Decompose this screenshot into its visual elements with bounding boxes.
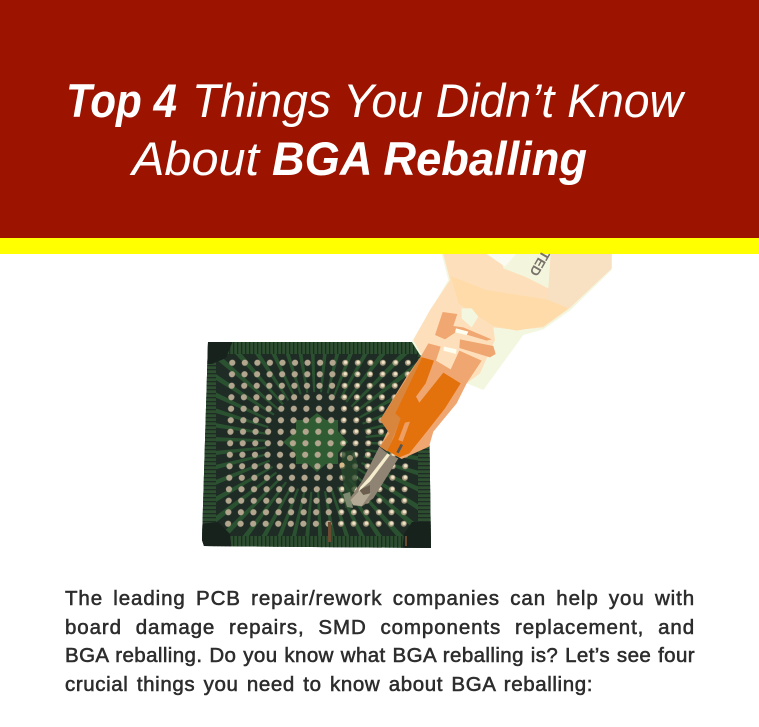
intro paragraph bbox=[65, 587, 695, 696]
barrel band bbox=[451, 276, 568, 331]
label white bbox=[487, 254, 516, 267]
collar highlights bbox=[462, 308, 478, 327]
centre pad bbox=[283, 413, 348, 472]
edge traces bbox=[198, 338, 434, 552]
brown stains bbox=[328, 522, 331, 542]
tip highlight bbox=[358, 453, 390, 492]
illustration and banner bbox=[0, 0, 759, 548]
intro paragraph: The leading PCB repair/rework companies can help you with bbox=[65, 587, 695, 610]
syringe barrel glow bbox=[412, 254, 612, 390]
BGA chip bbox=[198, 338, 434, 552]
dark corners bbox=[198, 338, 434, 552]
solder balls bbox=[222, 357, 414, 530]
tip shade bbox=[351, 488, 371, 506]
intro paragraph: board damage repairs, SMD components replacement, and bbox=[65, 616, 695, 638]
metal tip bbox=[350, 447, 398, 507]
label bbox=[500, 254, 551, 288]
nozzle streak bbox=[398, 422, 410, 442]
intro paragraph: crucial things you need to know about BGA reballing: bbox=[65, 672, 593, 696]
label text: TED bbox=[526, 248, 553, 279]
title bbox=[66, 74, 686, 185]
repaired patch bbox=[339, 450, 358, 510]
nozzle collar bbox=[380, 343, 482, 459]
lower collar ring bbox=[459, 339, 496, 357]
upper collar ring bbox=[435, 312, 492, 341]
syringe bbox=[350, 248, 612, 507]
syringe barrel bbox=[413, 254, 612, 383]
title: Top 4 bbox=[66, 74, 177, 127]
title: About bbox=[129, 132, 261, 185]
intro paragraph: BGA reballing. Do you know what BGA reballing is? Let’s see four bbox=[65, 644, 695, 667]
circuit traces bbox=[221, 347, 411, 537]
header banner bbox=[0, 0, 759, 238]
nozzle main bbox=[387, 357, 461, 457]
yellow stripe bbox=[0, 238, 759, 254]
collar white ring bbox=[455, 328, 468, 335]
title: BGA Reballing bbox=[272, 132, 587, 185]
title: Things You Didn’t Know bbox=[192, 74, 686, 127]
nozzle shade bbox=[380, 357, 425, 452]
upper barrel shade bbox=[517, 254, 612, 308]
